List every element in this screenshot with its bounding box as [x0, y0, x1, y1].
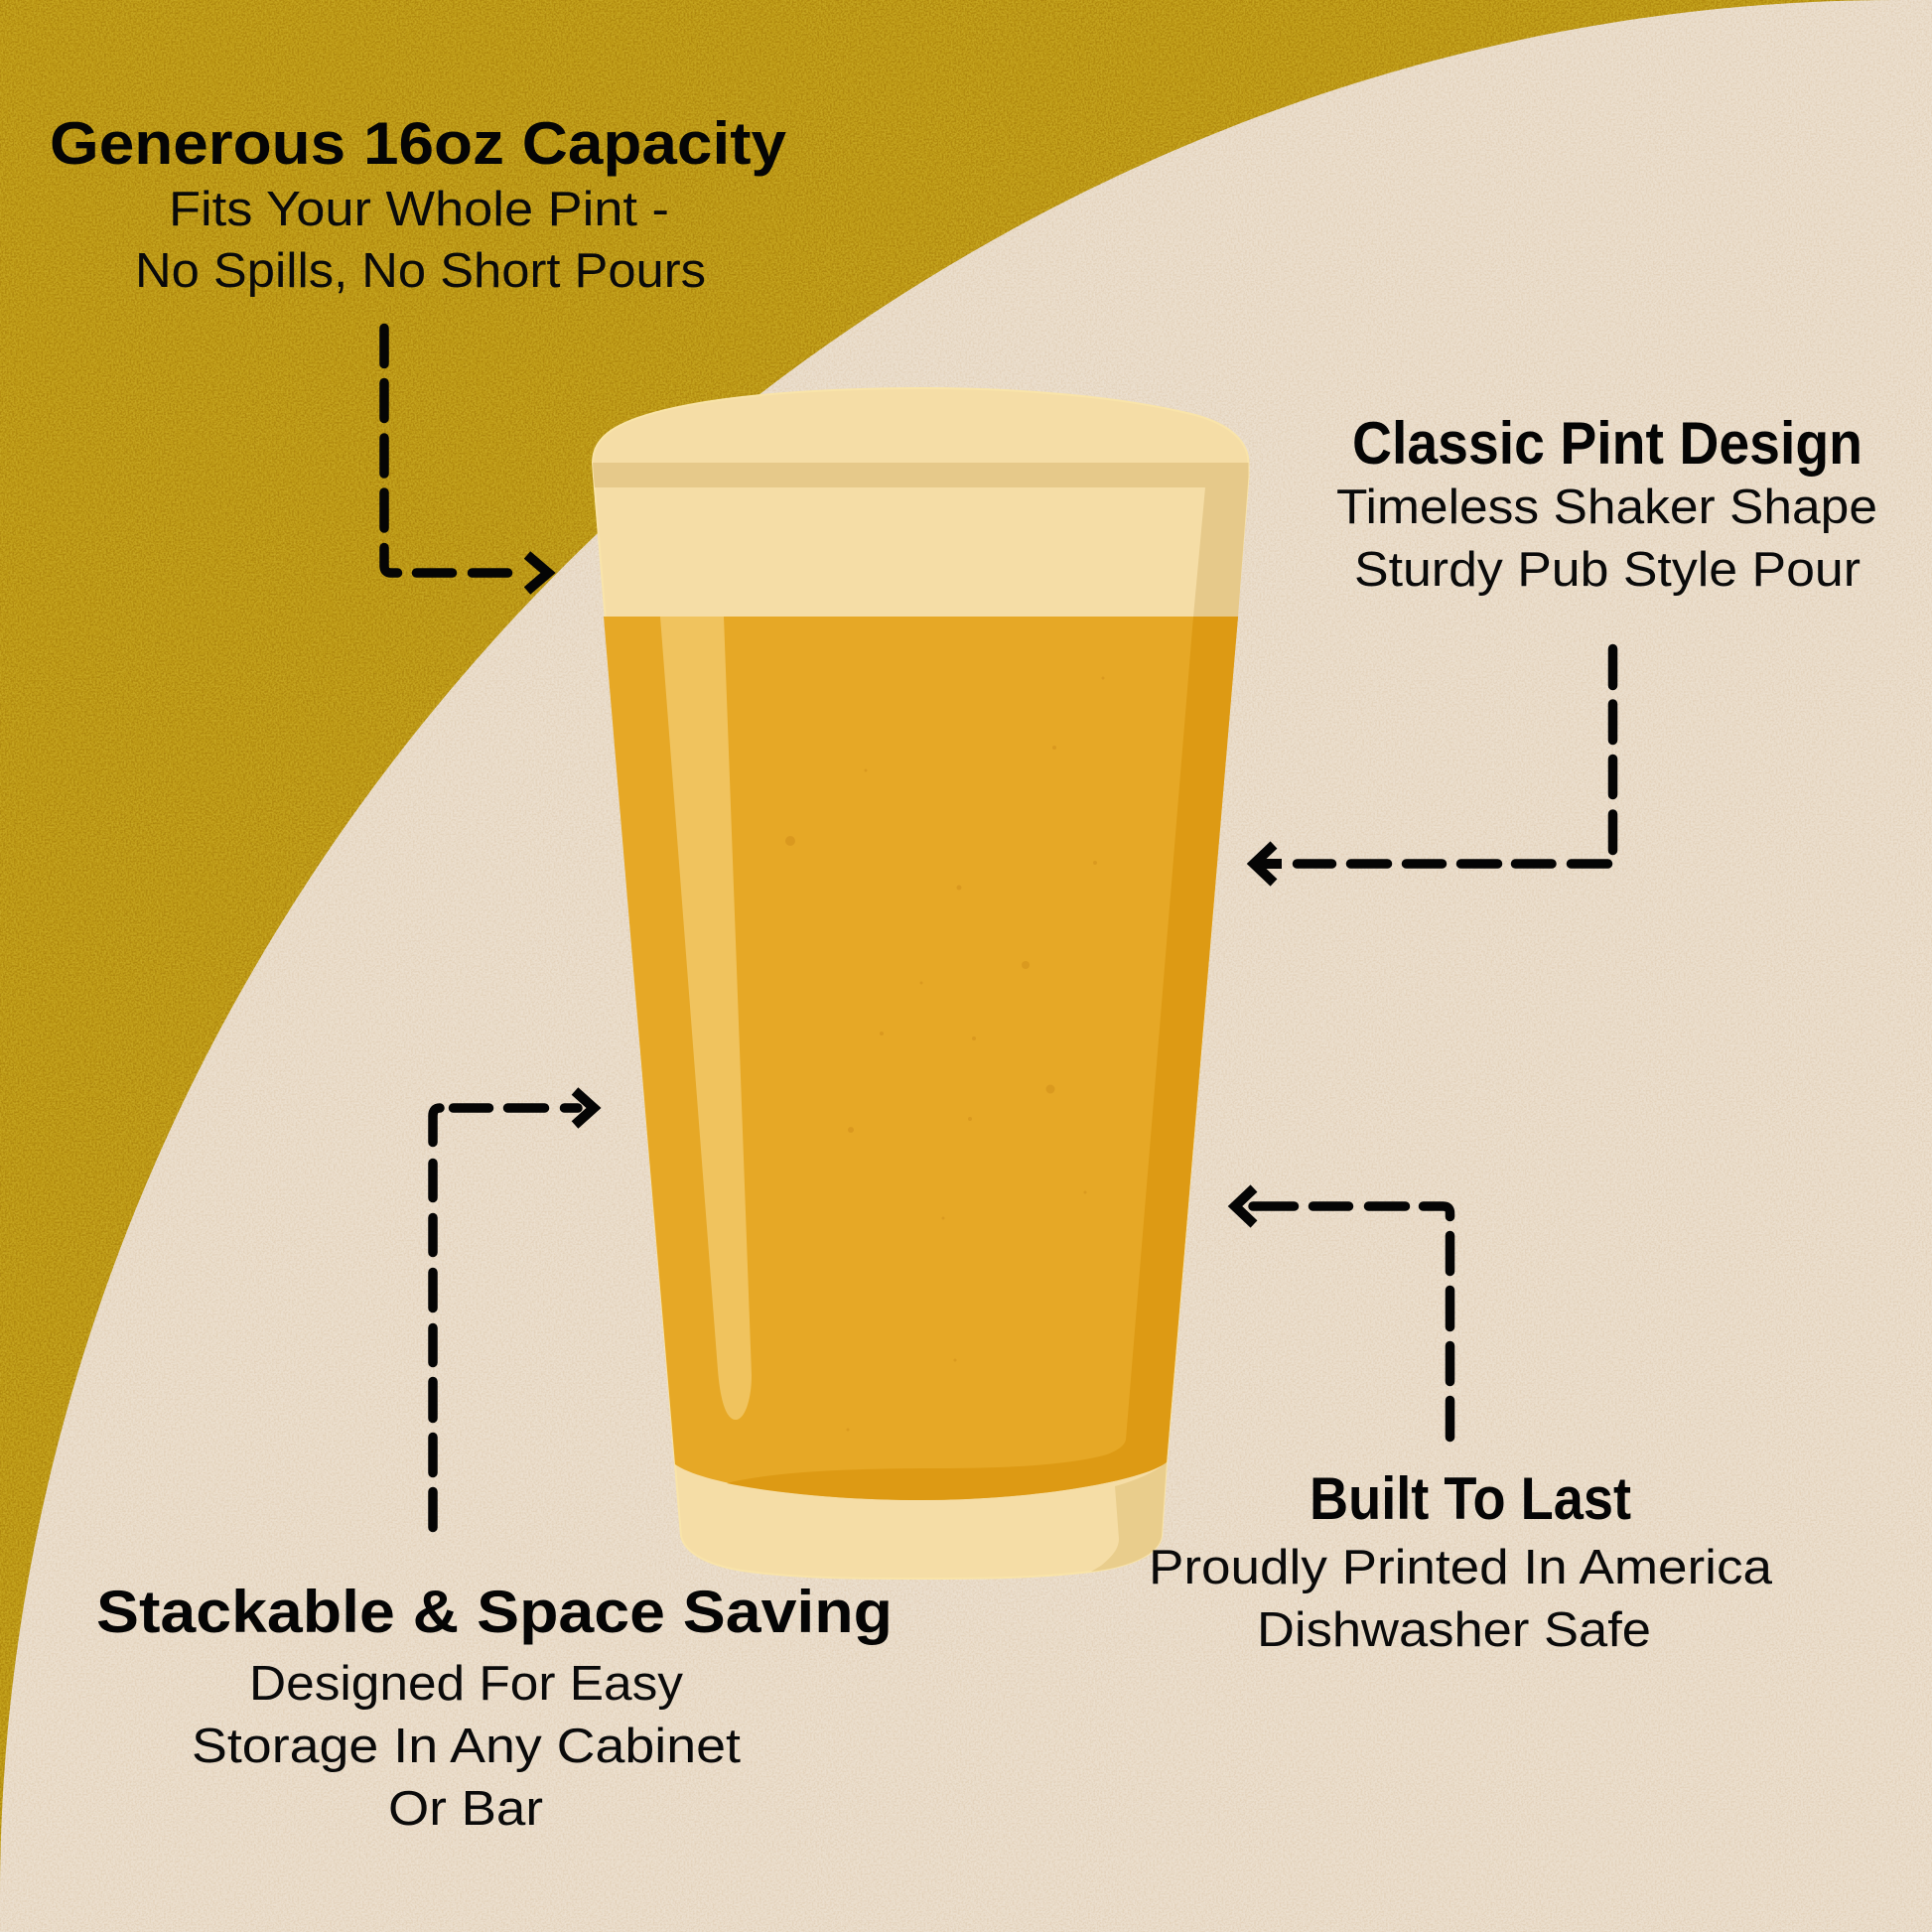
description: Or Bar — [388, 1782, 543, 1836]
description — [135, 183, 706, 298]
heading: Stackable & Space Saving — [96, 1579, 893, 1645]
description: No Spills, No Short Pours — [135, 244, 706, 298]
beer bubbles — [785, 677, 1104, 1432]
description: Proudly Printed In America — [1149, 1541, 1773, 1594]
description: Fits Your Whole Pint - — [169, 183, 669, 236]
description: Sturdy Pub Style Pour — [1354, 543, 1861, 597]
beer right and bottom shade — [727, 617, 1238, 1500]
arrow: stackable to glass side — [433, 1091, 594, 1527]
glass rim band — [593, 463, 1249, 617]
description — [1336, 481, 1877, 597]
callout: Stackable & Space Saving — [96, 1579, 893, 1836]
arrow: design to glass side — [1254, 649, 1612, 883]
heading: Built To Last — [1310, 1465, 1631, 1532]
callout: Built To Last — [1149, 1465, 1773, 1657]
glass highlight streak — [660, 617, 752, 1420]
arrow: built to last to glass side — [1235, 1188, 1449, 1438]
description: Dishwasher Safe — [1257, 1603, 1651, 1657]
beer body — [604, 617, 1238, 1500]
description: Timeless Shaker Shape — [1336, 481, 1877, 534]
description: Designed For Easy — [249, 1657, 684, 1711]
arrow: capacity to glass rim — [384, 328, 548, 591]
base shade — [1091, 1462, 1167, 1572]
callout: Classic Pint Design — [1336, 410, 1877, 597]
description: Storage In Any Cabinet — [192, 1720, 741, 1773]
heading: Classic Pint Design — [1352, 410, 1863, 477]
callout: Generous 16oz Capacity — [50, 110, 787, 298]
pint glass illustration — [593, 388, 1249, 1579]
description — [1149, 1541, 1773, 1657]
glass silhouette with foam and base — [593, 388, 1249, 1579]
heading: Generous 16oz Capacity — [50, 110, 787, 177]
description — [192, 1657, 741, 1836]
